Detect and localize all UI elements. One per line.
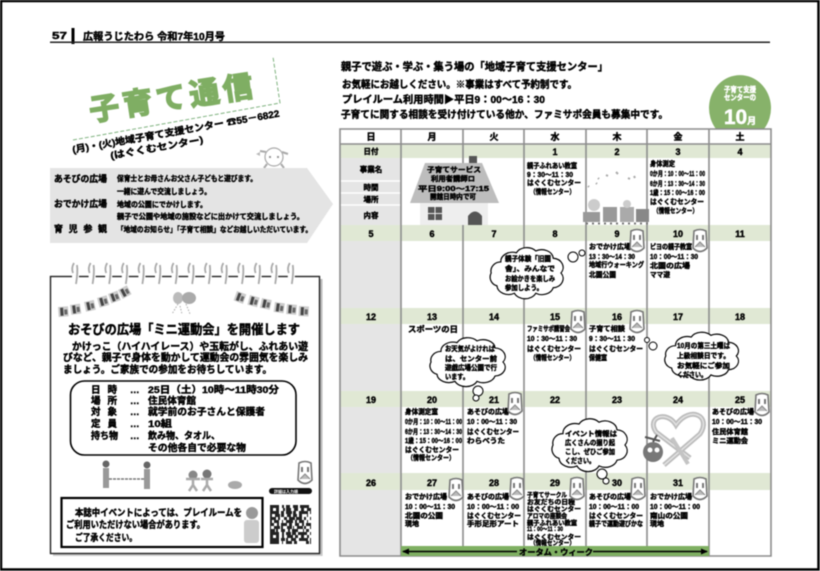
sunday column shading [340, 158, 401, 556]
callout: cloud 2: お天気がよければ [445, 344, 495, 353]
event details box: 10組 [148, 418, 173, 430]
date numbers: 29 [550, 478, 560, 488]
event: day 3: （情報センター） [653, 206, 698, 215]
weekday headers: 月 [427, 132, 437, 142]
event: day 20: （情報センター） [407, 453, 455, 462]
callout: cloud 2: 遊戯広場公園で行 [445, 363, 497, 372]
callout: cloud 1: お絵かきを楽しみ [505, 274, 555, 283]
event: day 27: 現地 [405, 519, 419, 528]
event: day 3: 0か月：10：00～11：00 [650, 170, 705, 178]
mascot day 27 [449, 478, 463, 500]
event: day 3: 6か月：13：30～14：30 [650, 180, 705, 188]
event: day 16: はぐくむセンター [589, 344, 643, 353]
callout: cloud 4: ください。 [565, 456, 595, 465]
event details box: … [130, 419, 140, 430]
event: day 1 [527, 161, 581, 196]
event details box: … [130, 407, 140, 418]
event: day 15: 10：30～11：30 [527, 336, 577, 343]
date numbers: 23 [612, 395, 622, 405]
event: day 20 [405, 407, 462, 462]
bunting right [234, 291, 309, 317]
bunting left [58, 285, 132, 317]
date numbers: 14 [489, 312, 499, 322]
callout: cloud 1: 舎」、みんなで [505, 264, 555, 273]
event: day 1: （情報センター） [530, 187, 575, 196]
event details box: 場 所 [91, 395, 117, 407]
centre introduction text: 子育てに関する相談を受け付けている他か、ファミサポ会員も募集中です。 [341, 108, 668, 121]
date numbers: 10 [673, 229, 683, 239]
event: day 28: はぐくむセンター [467, 511, 521, 520]
event: day 3: はぐくむセンター [650, 197, 704, 206]
event: day 21: はぐくむセンター [467, 427, 519, 436]
date numbers: 8 [552, 229, 558, 239]
calendar binding rings [72, 263, 295, 284]
event: day 29: 11：00～11：30 [527, 526, 563, 533]
event: day 20: 身体測定室 [405, 407, 438, 416]
event: day 10: 10：00～11：30 [650, 254, 698, 261]
event: day 20: 0か月：10：00～11：00 [405, 418, 462, 426]
event: day 9: 地域行ウォーキング [589, 260, 644, 269]
event: day 16 [589, 324, 643, 362]
autumn week band [401, 546, 709, 557]
event: day 10: 北園の広場 [650, 261, 690, 270]
event: day 31: おでかけ広場 [650, 492, 692, 501]
event: day 3: 身体測定 [650, 159, 675, 168]
event: day 25 [712, 407, 762, 445]
illustration: house [410, 156, 499, 225]
weekday headers [366, 131, 745, 142]
event details box: 住民体育館 [148, 395, 196, 407]
event: day 31: 南山の公園 [650, 511, 688, 520]
note box: 本誌中イベントによっては、プレイルームを [75, 507, 242, 519]
event details box: 定 員 [91, 418, 117, 430]
centre introduction text [341, 60, 668, 121]
callout: cloud 1: 親子体験「旧園 [505, 254, 551, 263]
weekday headers: 火 [489, 132, 499, 142]
date numbers: 20 [427, 395, 437, 405]
grid lines [340, 129, 771, 556]
event: day 30: 10：00～11：00 [589, 504, 639, 511]
event: day 3: 1歳：15：00～16：00 [650, 188, 705, 197]
mascot day 31 [693, 478, 707, 500]
event: day 31: 10：00～11：00 [650, 504, 700, 511]
callout: cloud 3 [644, 332, 738, 380]
event: day 21 [467, 407, 519, 445]
event: day 21: あそびの広場 [467, 407, 509, 416]
date numbers: 26 [366, 478, 376, 488]
event: day 10: ママ遊 [650, 270, 670, 279]
weekday headers: 木 [612, 131, 622, 142]
date numbers: 16 [612, 312, 622, 322]
row labels: 事業名 [360, 164, 382, 174]
panel: notice calendar page [50, 263, 322, 556]
page header: 57 [52, 31, 68, 42]
centre introduction text: プレイルーム利用時間▶平日9：00～16：30 [342, 93, 545, 106]
row label separators [340, 181, 401, 205]
QR code [270, 505, 311, 545]
date numbers: 24 [673, 395, 683, 405]
event: day 28: 10：00～11：00 [467, 504, 519, 511]
icon: person [244, 507, 259, 543]
event: day 31 [650, 492, 700, 528]
mascot day 30 [631, 478, 645, 500]
event: day 29: アロマの座談会 [527, 511, 567, 520]
illustration: house: 子育てサービス [427, 165, 481, 174]
illustration: house: 開館日時内で可 [430, 192, 476, 201]
event: day 29: 親子ふれあい教室 [527, 518, 577, 527]
label pill: 詳細は入力順 [274, 488, 298, 494]
date numbers: 31 [673, 478, 683, 488]
center contact text: (月)・(火)地域子育て支援センター ☎55－6822 [71, 108, 280, 156]
callout: cloud 1 [490, 248, 585, 299]
event details box [70, 381, 296, 455]
icon: two adults with tape [102, 460, 150, 489]
event: day 15 [527, 324, 581, 362]
illustration: heart and apple character [643, 414, 703, 465]
date numbers: 7 [491, 229, 497, 239]
event details box: … [130, 396, 140, 407]
date numbers: 9 [614, 229, 620, 239]
event: day 1: はぐくむセンター [527, 178, 581, 187]
date numbers: 15 [550, 312, 560, 322]
mascot day 21 [508, 392, 522, 414]
event: day 20: 6か月：13：30～14：30 [405, 428, 462, 436]
event: day 30: はぐくむセンター [589, 511, 643, 520]
date numbers: 5 [368, 229, 374, 239]
mascot day 10 [693, 230, 707, 252]
mascot day 16 [630, 310, 644, 332]
panel: arrow programme list: あそびの広場 [54, 173, 107, 184]
event: day 30 [589, 492, 643, 528]
event: day 9: 北園公園 [589, 270, 616, 279]
date numbers: 12 [366, 312, 376, 322]
note box: ご了承ください。 [75, 532, 137, 544]
illustration: music train [583, 172, 649, 224]
event details box: 25日（土）10時～11時30分 [148, 384, 280, 396]
callout: cloud 2: います。 [445, 373, 469, 381]
callout: cloud 3: ください。 [677, 370, 707, 379]
notice paragraph: ましょう。ご家族での参加をお待ちしています。 [63, 363, 272, 376]
event: day 21: わらべうた [467, 436, 505, 445]
badge: 10月 [709, 75, 771, 129]
center contact text: (はぐくむセンター) [109, 134, 204, 162]
event: day 20: はぐくむセンター [405, 445, 459, 454]
callout: cloud 4: 広くさんの掘り起 [565, 438, 615, 447]
event: day 25: ミニ運動会 [712, 436, 748, 445]
event: day 25: 住民体育館 [712, 427, 748, 436]
badge: 10月: センターの [724, 92, 756, 102]
date numbers: 3 [675, 147, 681, 157]
event: day 29 [527, 490, 581, 547]
date numbers: 19 [366, 395, 376, 405]
title: 子育て通信: 子育て通信 [87, 70, 255, 128]
event: day 10 [650, 242, 698, 279]
callout: cloud 3: お気軽にご参加 [677, 361, 730, 370]
centre introduction text: 親子で遊ぶ・学ぶ・集う場の「地域子育て支援センター」 [341, 60, 608, 73]
event: day 29: お友だちの日程 [527, 497, 576, 506]
panel: arrow programme list: 親子で公園や地域の施設などに出かけて交流しましょう。 [117, 211, 304, 221]
event: day 29: 子育てサークル [527, 490, 567, 499]
panel: arrow programme list: 一緒に遊んで交流しましょう。 [117, 186, 211, 196]
event: day 9: おでかけ広場 [589, 242, 631, 251]
event details box: 持ち物 [91, 430, 118, 442]
label pill [269, 488, 312, 494]
event: day 20: 1歳：15：00～16：00 [405, 436, 462, 445]
notice heading: おそびの広場「ミニ運動会」を開催します [68, 322, 300, 337]
panel: arrow programme list: 「地域のお知らせ」「子育て相談」などお越しいただいています。 [117, 224, 312, 234]
event details box: 就学前のお子さんと保護者 [148, 406, 265, 418]
event: day 25: あそびの広場 [712, 407, 754, 416]
callout: cloud 3: 上級相談日です。 [677, 351, 730, 360]
row labels: 内容 [364, 210, 379, 220]
title: 子育て通信 [73, 57, 280, 140]
callout: cloud 4: こし、ぜひご参加 [565, 447, 615, 456]
event: day 1: 親子ふれあい教室 [527, 161, 577, 170]
icon: running children and dog [186, 470, 242, 491]
event: day 30: 親子で運動遊びかな [589, 519, 643, 528]
event: day 1: 9：30～11：30 [527, 172, 573, 179]
centre introduction text: お気軽にお越しください。※事業はすべて予約制です。 [342, 78, 577, 91]
weekday headers: 水 [550, 131, 560, 142]
row labels: 時間 [364, 182, 378, 192]
panel: arrow programme list: 保育士とお母さんお父さん子どもと遊びます。 [117, 173, 257, 183]
mascot day 9 [630, 230, 644, 252]
notice paragraph [63, 340, 308, 376]
mascot day 15 [571, 310, 585, 332]
panel: arrow programme list [50, 168, 333, 243]
date numbers: 2 [614, 147, 620, 157]
event: day 13: スポーツの日 [408, 325, 458, 334]
callout: cloud 3: 10月の第三土曜は [677, 341, 730, 350]
event: day 28: あそびの広場 [467, 492, 509, 501]
page header: 広報うじたわら 令和7年10月号 [83, 30, 225, 43]
date numbers: 11 [735, 229, 745, 239]
event: day 27: 10：00～11：30 [405, 504, 455, 511]
note box: ご利用いただけない場合があります。 [66, 519, 205, 531]
event: day 3 [650, 159, 705, 215]
event: day 9: 13：30～14：30 [589, 254, 635, 261]
event: day 10: ピヨの親子教室 [650, 242, 692, 251]
date numbers: 17 [673, 312, 683, 322]
date numbers [366, 147, 745, 488]
icon: mascot [298, 462, 312, 484]
event: day 29: はぐくむセンター [527, 532, 581, 541]
date numbers: 18 [735, 312, 745, 322]
mascot day 28 [510, 478, 524, 500]
date numbers: 22 [550, 395, 560, 405]
event: day 31: 現地 [650, 519, 664, 528]
calendar [340, 129, 771, 557]
event details box: その他各自で必要な物 [148, 442, 246, 454]
event: day 28: 手形足形アート [467, 519, 519, 528]
callout: cloud 4 [552, 419, 627, 484]
weekday headers: 金 [673, 131, 683, 142]
row labels: 日付 [364, 146, 379, 156]
event details box: … [130, 431, 140, 442]
notice paragraph: びなど、親子で身体を動かして運動会の雰囲気を楽しみ [63, 351, 308, 364]
icon: dog [256, 148, 288, 168]
event: day 29: （情報センター） [530, 538, 575, 547]
callout: cloud 1: 参加しよう。 [505, 283, 543, 292]
event: day 16: 子育て相談 [589, 324, 625, 333]
date numbers: 1 [552, 147, 558, 157]
panel: arrow programme list: 地域の公園にでかけします。 [117, 199, 207, 209]
event details box: 飲み物、タオル、 [148, 430, 220, 442]
event details box: 日 時 [91, 384, 117, 396]
event: day 27: 北園の公園 [405, 511, 443, 520]
panel: arrow programme list: おでかけ広場 [54, 198, 107, 209]
date numbers: 21 [489, 395, 499, 405]
panel: arrow programme list: 育 児 参 観 [54, 223, 107, 234]
event: day 29: はぐくむセンター [527, 504, 581, 513]
callout: cloud 2 [430, 338, 505, 401]
mascot day 29 [570, 478, 584, 500]
icon: balloons [172, 292, 196, 314]
badge: 10月: 10月 [724, 106, 756, 129]
date numbers: 27 [427, 478, 437, 488]
page header [50, 28, 770, 44]
date numbers: 13 [427, 312, 437, 322]
date numbers: 4 [737, 147, 743, 157]
event: day 27: おでかけ広場 [405, 492, 447, 501]
event: day 27 [405, 492, 455, 528]
autumn week band: オータム・ウィーク [519, 547, 593, 557]
badge: 10月: 子育て支援 [724, 84, 756, 94]
row labels: 場所 [364, 194, 379, 204]
event: day 30: あそびの広場 [589, 492, 631, 501]
event: day 15: はぐくむセンター [527, 344, 581, 353]
date numbers: 28 [489, 478, 499, 488]
week bands [340, 144, 771, 490]
illustration: house: 平日9:00～17:15 [418, 185, 489, 193]
callout: cloud 2: は、センター前 [445, 354, 497, 363]
note box [62, 498, 262, 547]
event details box: … [130, 385, 140, 396]
event: day 21: 10：00～11：30 [467, 419, 517, 426]
event: day 25: 10：00～11：30 [712, 419, 762, 426]
event: day 28 [467, 492, 521, 528]
date numbers: 6 [429, 229, 435, 239]
mascot day 25 [755, 394, 769, 416]
illustration: house: 利用者講師ロ [431, 174, 475, 183]
event: day 16: 9：30～11：30 [589, 336, 635, 343]
event: day 15: ファミサポ講習会 [527, 324, 570, 333]
callout: cloud 4: イベント情報は [565, 429, 617, 438]
date numbers: 30 [612, 478, 622, 488]
date numbers: 25 [735, 395, 745, 405]
event: day 15: （情報センター） [530, 353, 575, 362]
notice paragraph: かけっこ（ハイハイレース）や玉転がし、ふれあい遊 [72, 340, 308, 353]
weekday headers: 土 [735, 131, 745, 142]
event: day 9 [589, 242, 644, 279]
event: day 16: 保健室 [589, 353, 607, 362]
row labels [360, 146, 382, 220]
weekday headers: 日 [366, 132, 376, 142]
event details box: 対 象 [91, 406, 117, 418]
